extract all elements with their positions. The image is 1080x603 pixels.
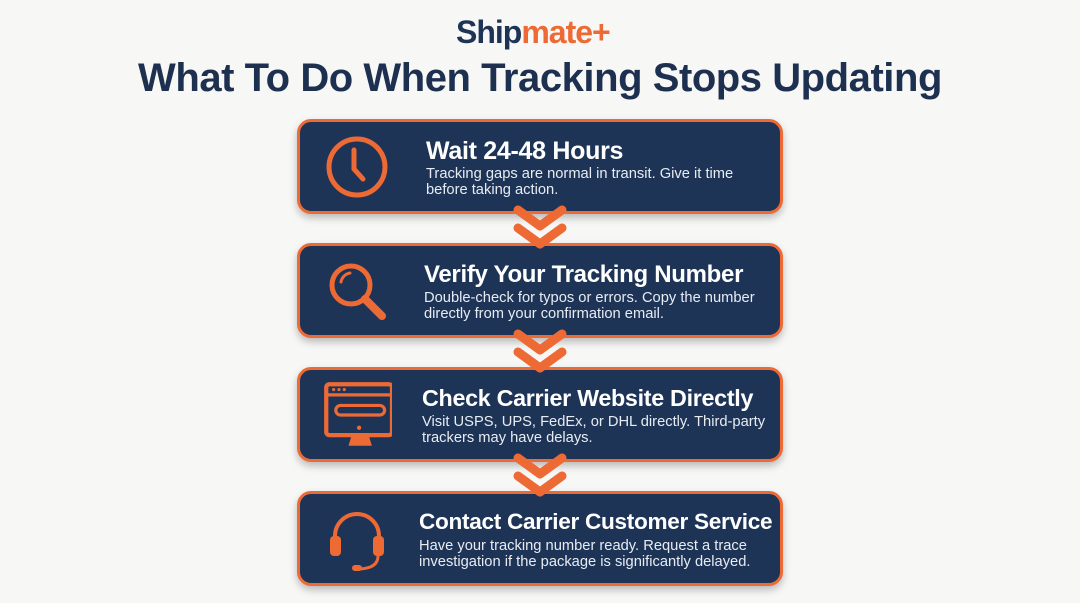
text: [422, 414, 765, 446]
text: Tracking gaps are normal in transit. Give it time: [426, 166, 733, 182]
panel: contact: [297, 491, 783, 586]
text: [424, 290, 755, 322]
icon: clock: [326, 136, 388, 198]
icon: monitor: [324, 382, 392, 446]
text: Visit USPS, UPS, FedEx, or DHL directly. Third-party: [422, 414, 765, 430]
icon: headset: [330, 512, 384, 571]
text: [426, 166, 733, 198]
arrow: [514, 454, 566, 497]
panel: carrier website: [297, 367, 783, 462]
text: directly from your confirmation email.: [424, 306, 664, 322]
arrow: [514, 330, 566, 373]
panel: wait: [297, 119, 783, 214]
text: before taking action.: [426, 182, 558, 198]
title: What To Do When Tracking Stops Updating: [138, 56, 942, 100]
text: Have your tracking number ready. Request a trace: [419, 538, 747, 554]
text: investigation if the package is significantly delayed.: [419, 554, 750, 570]
text: [419, 538, 750, 570]
arrow: [514, 206, 566, 249]
text: Double-check for typos or errors. Copy the number: [424, 290, 755, 306]
text: trackers may have delays.: [422, 430, 593, 446]
heading: Contact Carrier Customer Service: [419, 509, 772, 534]
icon: magnifier: [330, 264, 386, 320]
heading: Wait 24-48 Hours: [426, 137, 623, 165]
heading: Verify Your Tracking Number: [424, 261, 743, 288]
logo: Shipmate+: [456, 14, 610, 50]
heading: Check Carrier Website Directly: [422, 385, 753, 411]
panel: verify: [297, 243, 783, 338]
